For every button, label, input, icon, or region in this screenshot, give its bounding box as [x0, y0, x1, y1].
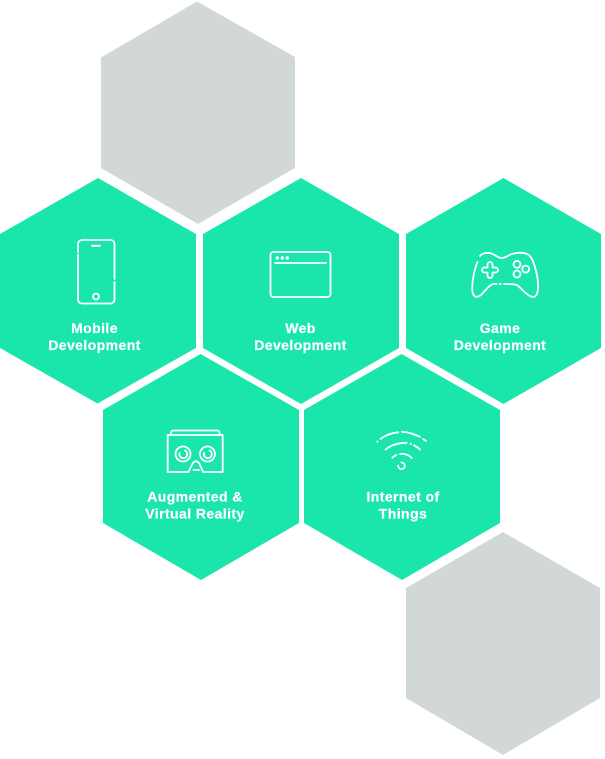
panel: augmented and virtual reality	[103, 354, 299, 580]
icon: game controller	[472, 253, 538, 297]
label: Augmented & Virtual Reality: Augmented &	[147, 488, 243, 504]
decorative grey hexagon: bottom	[406, 532, 600, 755]
hexagon background	[0, 178, 196, 404]
label: Web Development: Web	[285, 320, 316, 336]
icon: browser window	[270, 252, 330, 297]
hexagon background	[203, 178, 399, 404]
label: Mobile Development: Mobile	[71, 320, 118, 336]
hexagon background	[406, 178, 601, 404]
panel: game development	[406, 178, 601, 404]
label: Augmented & Virtual Reality: Virtual Reality	[145, 506, 245, 522]
hexagon background	[103, 354, 299, 580]
label: Internet of Things: Things	[379, 506, 427, 522]
decorative grey hexagon: top	[101, 2, 295, 224]
label: Game Development: Game	[480, 320, 520, 336]
label: Internet of Things: Internet of	[366, 488, 440, 504]
label: Web Development: Development	[254, 337, 347, 353]
label: Game Development: Development	[454, 337, 546, 353]
icon: VR headset	[168, 430, 223, 472]
panel: web development	[203, 178, 399, 404]
panel: mobile development	[0, 178, 196, 404]
label: Mobile Development: Development	[48, 337, 141, 353]
hexagon background	[304, 354, 500, 580]
icon: smartphone	[78, 240, 114, 304]
icon: wifi signal	[377, 432, 426, 469]
panel: internet of things	[304, 354, 500, 580]
